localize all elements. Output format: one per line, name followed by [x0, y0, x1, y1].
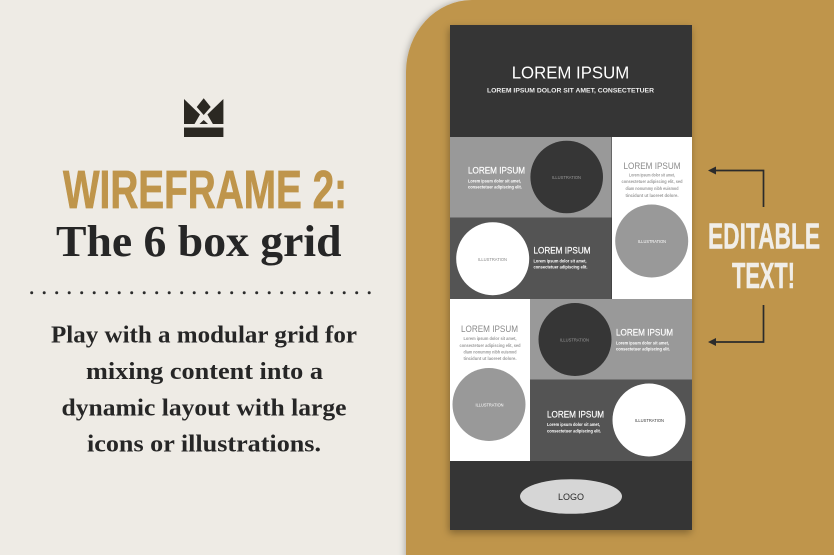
- box 3: white tall with gray circle: Lorem ipsum dolor sit amet,: [629, 172, 675, 178]
- box 4: white tall with gray circle: [450, 299, 530, 461]
- box 3: white tall with gray circle: diam nonummy nibh euismod: [626, 186, 679, 191]
- box 2: dark with white circle: consectetuer adipiscing elit.: [534, 264, 588, 270]
- box 2: dark with white circle: Lorem ipsum dolor sit amet,: [534, 258, 587, 264]
- footer logo: [520, 479, 622, 514]
- box 3: white tall with gray circle: consectetuer adipiscing elit, sed: [622, 179, 683, 184]
- box 1: gray with dark circle: LOREM IPSUM: [468, 166, 525, 176]
- box 4: white tall with gray circle: consectetuer adipiscing elit, sed: [460, 343, 521, 348]
- box 4: white tall with gray circle: diam nonummy nibh euismod: [464, 350, 517, 354]
- body text: icons or illustrations.: [87, 432, 321, 458]
- header title: LOREM IPSUM: [512, 62, 629, 82]
- panel: wireframe page: [450, 25, 692, 530]
- box 3: white tall with gray circle: tincidunt ut laoreet dolore.: [626, 193, 678, 198]
- box 1: gray with dark circle: consectetuer adipiscing elit.: [468, 184, 522, 190]
- body text: Play with a modular grid for: [51, 322, 357, 348]
- box 6: dark with white circle: consectetuer adipiscing elit.: [547, 428, 601, 434]
- box 4: white tall with gray circle: ILLUSTRATION: [476, 402, 504, 408]
- subheading: the 6 box grid: The 6 box grid: [56, 217, 342, 266]
- box 6: dark with white circle: ILLUSTRATION: [635, 418, 664, 423]
- heading: wireframe 2: WIREFRAME 2:: [63, 160, 347, 220]
- box 3: white tall with gray circle: [612, 137, 692, 299]
- box 1: gray with dark circle: [450, 137, 612, 218]
- body text: dynamic layout with large: [62, 396, 347, 422]
- box 3: white tall with gray circle: LOREM IPSUM: [624, 161, 680, 171]
- box 5: gray with dark circle: consectetuer adipiscing elit.: [616, 346, 670, 352]
- box 4: white tall with gray circle: Lorem ipsum dolor sit amet,: [464, 336, 516, 341]
- box 4: white tall with gray circle: tincidunt ut laoreet dolore.: [464, 356, 516, 361]
- box 5: gray with dark circle: [530, 299, 692, 380]
- dotted divider: [32, 291, 370, 294]
- box 6: dark with white circle: Lorem ipsum dolor sit amet,: [547, 422, 601, 428]
- panel: gold background: [406, 0, 834, 555]
- footer logo: LOGO: [558, 492, 584, 502]
- box 1: gray with dark circle: ILLUSTRATION: [552, 175, 581, 180]
- arrow: upper: [708, 166, 764, 207]
- panel: header: [450, 25, 692, 530]
- body text: mixing content into a: [86, 359, 323, 385]
- callout: editable text: [708, 216, 820, 296]
- box 2: dark with white circle: ILLUSTRATION: [478, 257, 507, 262]
- box 4: white tall with gray circle: LOREM IPSUM: [461, 324, 518, 334]
- box 5: gray with dark circle: LOREM IPSUM: [616, 328, 673, 338]
- box 2: dark with white circle: LOREM IPSUM: [534, 246, 590, 256]
- box 5: gray with dark circle: ILLUSTRATION: [560, 338, 589, 342]
- box 6: dark with white circle: LOREM IPSUM: [547, 410, 604, 420]
- icon: crown logo: [184, 98, 223, 137]
- header subtitle: LOREM IPSUM DOLOR SIT AMET, CONSECTETUER: [487, 87, 654, 94]
- callout: editable text: TEXT!: [732, 255, 795, 296]
- box 5: gray with dark circle: Lorem ipsum dolor sit amet,: [616, 340, 670, 346]
- box 2: dark with white circle: [450, 218, 612, 299]
- box 1: gray with dark circle: Lorem ipsum dolor sit amet,: [468, 178, 522, 184]
- body text: [51, 322, 357, 458]
- box 6: dark with white circle: [530, 380, 692, 461]
- arrow: lower: [708, 305, 764, 346]
- box 3: white tall with gray circle: ILLUSTRATION: [638, 239, 666, 244]
